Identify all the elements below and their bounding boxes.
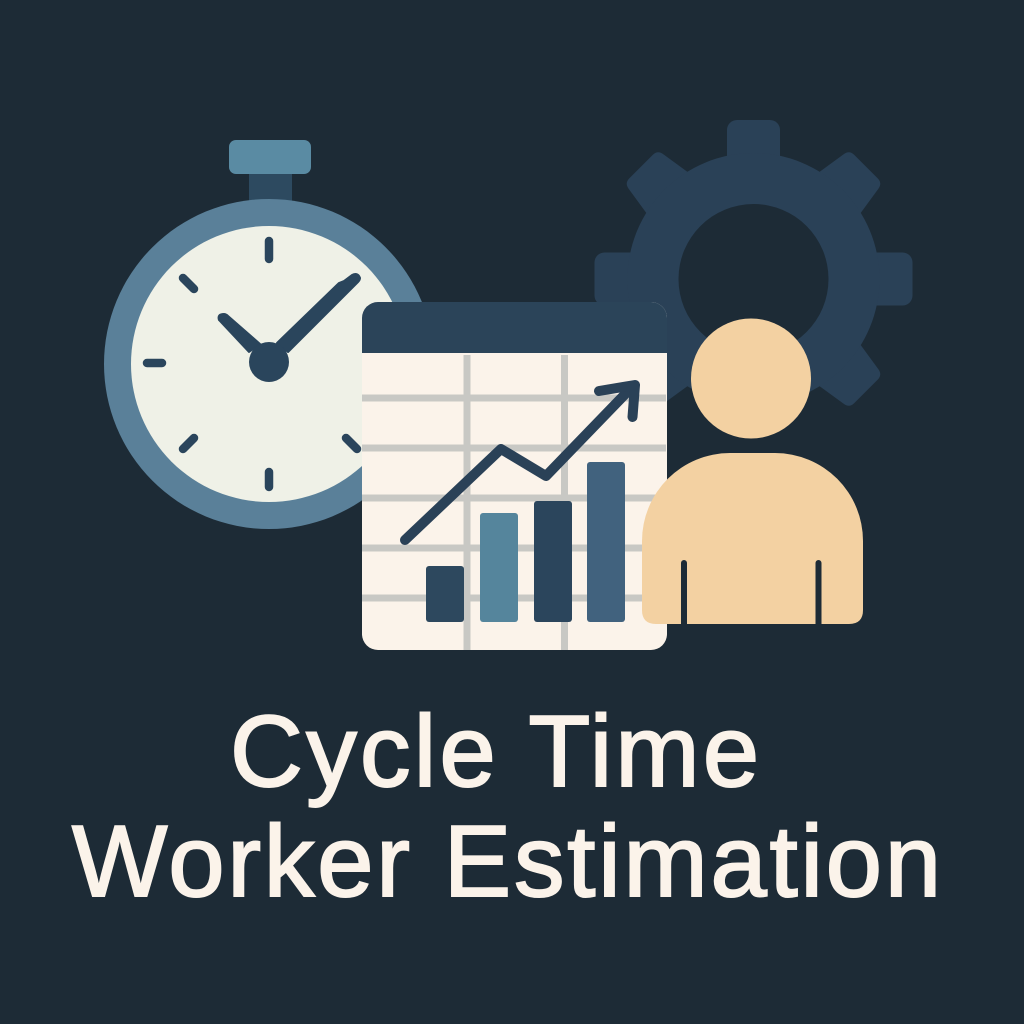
clock hands [219,274,360,352]
icon: stopwatch [104,140,434,529]
title: Worker Estimation [72,806,941,918]
title: Cycle Time [230,696,759,808]
icon: worker [642,318,863,627]
arrow: trend line [405,385,635,540]
title [72,696,941,918]
bar chart [426,462,625,622]
panel: spreadsheet chart [362,302,667,650]
icon: gear [594,120,912,414]
